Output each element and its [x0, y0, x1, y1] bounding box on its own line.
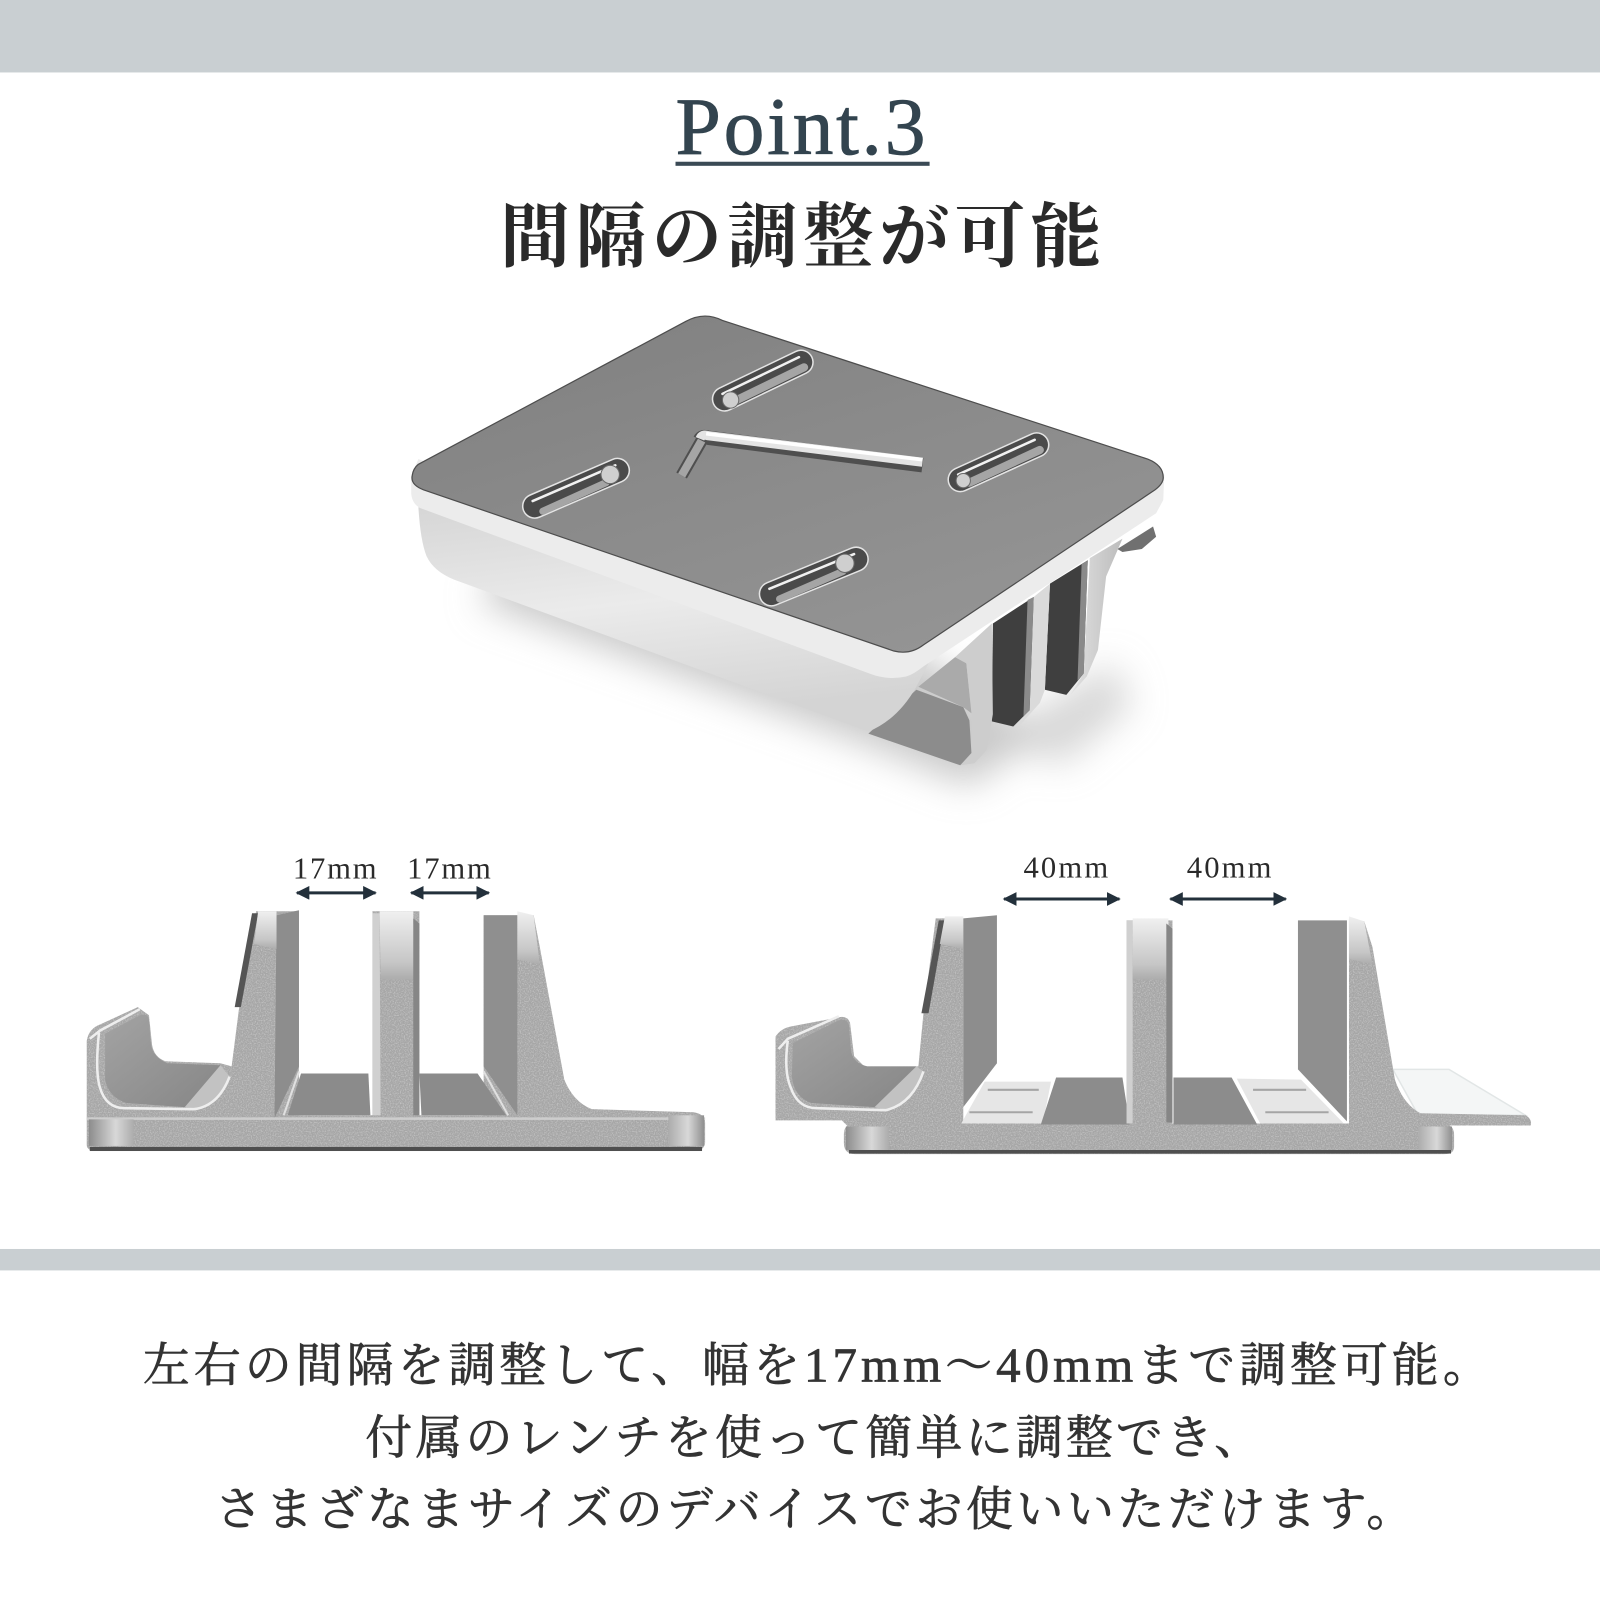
center fin highlight: [1127, 918, 1172, 1123]
fins under the stand: [868, 527, 1156, 765]
plate 3: [484, 911, 540, 1115]
dimension: 17mm left: 17mm: [293, 852, 377, 886]
body text: [143, 1338, 1490, 1537]
divider band: [0, 1249, 1600, 1270]
plate 3: [1298, 916, 1372, 1121]
hook white outline: [779, 1016, 923, 1110]
product photo: stand from above with wrench: [411, 316, 1164, 786]
slot bottom: [769, 554, 856, 599]
rim: [411, 459, 1164, 678]
inner arc of hook: [874, 1066, 923, 1110]
shadow: [480, 551, 1133, 786]
hex wrench: [682, 434, 922, 476]
center fin highlight: [372, 911, 419, 1115]
slot top: [722, 357, 804, 408]
base bar details: [87, 1115, 705, 1151]
body text: さまざなまサイズのデバイスでお使いいただけます。: [215, 1485, 1413, 1537]
front side of body: [418, 507, 929, 732]
body text: 付属のレンチを使って簡単に調整でき、: [365, 1413, 1261, 1465]
light floor panels: [961, 1079, 1344, 1123]
dimension: 40mm right: 40mm: [1187, 851, 1272, 885]
dimension: 40mm left: [1004, 851, 1119, 899]
left stand: narrow 17mm: [87, 910, 705, 1151]
heading: Point.3: Point.3: [676, 81, 926, 172]
top band: [0, 0, 1600, 72]
body text: 左右の間隔を調整して、幅を17mm～40mmまで調整可能。: [143, 1338, 1490, 1393]
plate: [412, 316, 1163, 652]
hook interior: [792, 1020, 916, 1107]
dark floor panels: [1041, 1078, 1257, 1124]
title: 間隔の調整が可能: [500, 199, 1101, 277]
dimension: 40mm left: 40mm: [1023, 851, 1108, 885]
lower base: [844, 1124, 1454, 1154]
base end highlights: [846, 1127, 1452, 1154]
right stand: wide 40mm: [776, 915, 1531, 1154]
plate 1 and dark strip: [235, 910, 299, 1118]
slot right: [956, 440, 1040, 488]
floor panels: [284, 1071, 508, 1115]
dimension: 17mm right: 17mm: [407, 852, 491, 886]
slot left: [533, 465, 619, 511]
hook white outline: [90, 1009, 230, 1109]
dimension: 40mm right: [1170, 851, 1286, 899]
upper part with hook, fins: [776, 918, 1531, 1126]
hook interior: [105, 1014, 220, 1107]
thin extended plate: [1393, 1069, 1526, 1115]
body silhouette: [87, 911, 705, 1151]
plate 1 and dark strip: [921, 915, 997, 1107]
inner arc of hook: [185, 1065, 230, 1109]
